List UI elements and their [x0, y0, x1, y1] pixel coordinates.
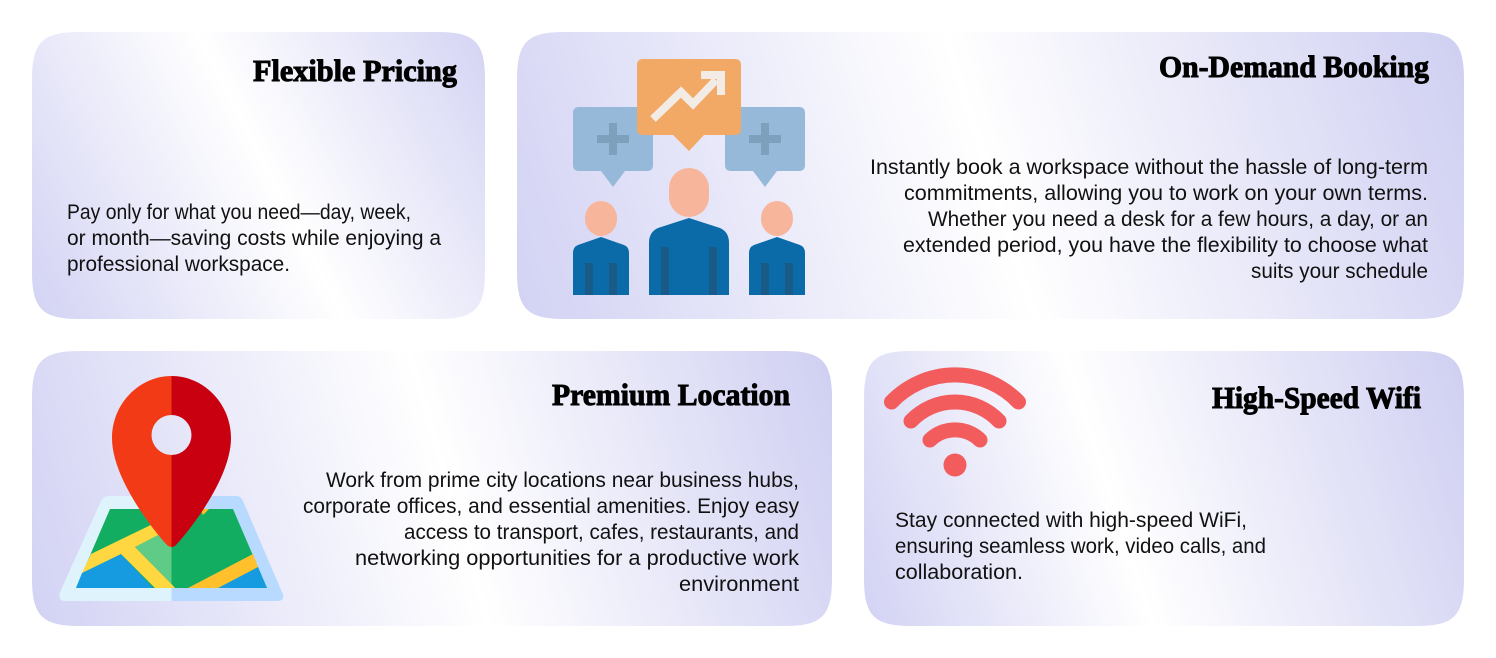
text: On-Demand Booking description — [870, 156, 1428, 283]
icon: wifi signal — [892, 375, 1018, 476]
text: On-Demand Booking description: Whether you need a desk for a few hours, a day, or an — [928, 208, 1428, 231]
heading: High-Speed Wifi: High-Speed Wifi — [1212, 380, 1421, 415]
text: High-Speed Wifi description — [895, 509, 1266, 584]
text: Premium Location description: Work from prime city locations near business hubs, — [326, 469, 799, 492]
text: High-Speed Wifi description: collaboration. — [895, 561, 1023, 584]
text: Flexible Pricing description — [67, 201, 441, 276]
text: On-Demand Booking description: suits your schedule — [1251, 260, 1428, 283]
panel background — [32, 32, 485, 319]
panel: Premium Location — [32, 351, 832, 626]
text: Premium Location description: networking opportunities for a productive work — [355, 547, 800, 570]
text: Premium Location description: corporate offices, and essential amenities. Enjoy easy — [303, 495, 799, 518]
text: On-Demand Booking description: commitments, allowing you to work on your own terms. — [904, 182, 1428, 205]
icon: team with speech bubbles and growth chart — [573, 59, 805, 295]
heading: Flexible Pricing: Flexible Pricing — [253, 53, 457, 88]
panel background — [32, 351, 832, 626]
text: Flexible Pricing description: Pay only for what you need—day, week, — [67, 201, 411, 224]
panel: High-Speed Wifi — [864, 351, 1464, 626]
icon: right speech bubble with plus — [725, 107, 805, 187]
icon: left person — [573, 201, 629, 295]
heading: Premium Location: Premium Location — [552, 377, 790, 412]
text: Premium Location description: access to transport, cafes, restaurants, and — [404, 521, 799, 544]
heading: On-Demand Booking: On-Demand Booking — [1159, 49, 1429, 84]
text: Premium Location description — [303, 469, 800, 596]
icon: orange speech bubble with rising arrow — [637, 59, 741, 151]
text: On-Demand Booking description: Instantly book a workspace without the hassle of long-term — [870, 156, 1428, 179]
panel background — [517, 32, 1464, 319]
text: High-Speed Wifi description: Stay connected with high-speed WiFi, — [895, 509, 1247, 532]
icon: map with location pin — [59, 376, 283, 601]
icon: right person — [749, 201, 805, 295]
text: High-Speed Wifi description: ensuring seamless work, video calls, and — [895, 535, 1266, 558]
text: Premium Location description: environment — [679, 573, 799, 596]
icon: centre person — [649, 168, 729, 295]
text: Flexible Pricing description: or month—saving costs while enjoying a — [67, 227, 441, 250]
panel: On-Demand Booking — [517, 32, 1464, 319]
text: On-Demand Booking description: extended period, you have the flexibility to choose what — [903, 234, 1428, 257]
icon: location pin — [112, 376, 231, 547]
panel background — [864, 351, 1464, 626]
text: Flexible Pricing description: professional workspace. — [67, 253, 290, 276]
panel: Flexible Pricing — [32, 32, 485, 319]
icon: folded map — [59, 496, 283, 601]
icon: left speech bubble with plus — [573, 107, 653, 187]
